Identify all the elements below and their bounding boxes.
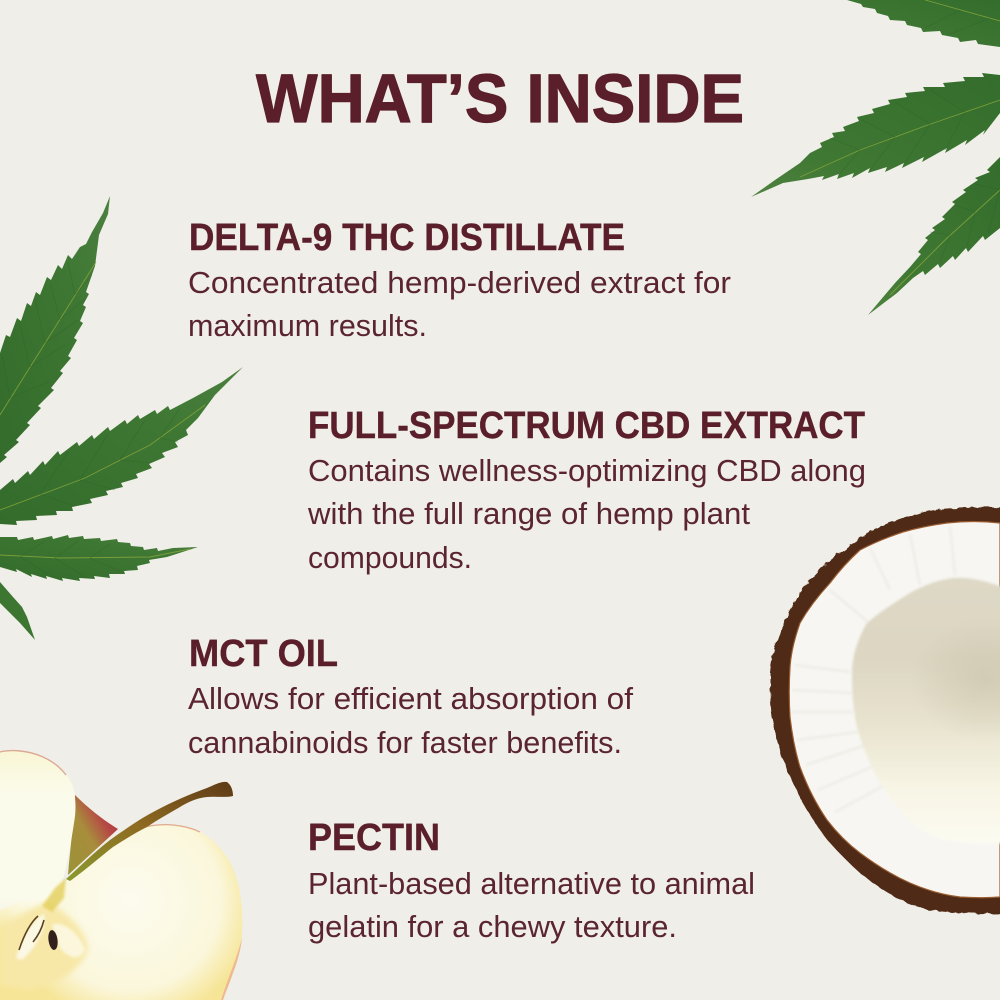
description: MCT oil [188, 681, 633, 760]
ingredient: delta-9 THC distillate [188, 217, 731, 343]
coconut half [770, 507, 1000, 914]
description: pectin: Plant-based alternative to animal [308, 866, 755, 901]
ingredient: pectin [308, 817, 755, 944]
title: WHAT’S INSIDE [256, 60, 744, 137]
coconut white flesh [789, 522, 1000, 898]
description: pectin: gelatin for a chewy texture. [308, 909, 677, 944]
apple right half [0, 825, 242, 1000]
cannabis leaves: left [0, 196, 243, 640]
description: CBD: with the full range of hemp plant [307, 496, 750, 531]
apple right rim blush [140, 825, 200, 832]
cannabis leaves: top right [751, 0, 1000, 315]
ingredient: MCT oil [188, 633, 633, 760]
description: MCT oil: Allows for efficient absorption of [188, 681, 633, 716]
left leaf: upper [0, 196, 110, 463]
description: CBD [307, 453, 866, 575]
apple left rim blush [0, 751, 66, 775]
apple left half [0, 751, 76, 935]
top right leaf: lower [868, 157, 1000, 315]
description: delta-9 [188, 265, 731, 343]
apple core [0, 878, 88, 990]
left leaf: middle [0, 367, 243, 525]
top right leaf: middle [751, 73, 1000, 197]
heading: MCT oil: MCT OIL [189, 633, 338, 675]
coconut hollow shading [910, 618, 1000, 742]
left leaf: lower [0, 535, 198, 581]
description: pectin [308, 866, 755, 944]
description: MCT oil: cannabinoids for faster benefits. [188, 725, 622, 760]
heading: pectin: PECTIN [308, 817, 440, 859]
description: delta-9: maximum results. [188, 308, 427, 343]
description: delta-9: Concentrated hemp-derived extract for [188, 265, 731, 300]
description: CBD: compounds. [308, 540, 472, 575]
heading: CBD: FULL-SPECTRUM CBD EXTRACT [308, 405, 865, 447]
apple stem [66, 782, 233, 881]
top right leaf: top [847, 0, 1000, 47]
coconut shell [770, 507, 1000, 914]
heading: delta-9: DELTA-9 THC DISTILLATE [189, 217, 625, 259]
left leaf: bottom tip [0, 582, 35, 640]
description: CBD: Contains wellness-optimizing CBD along [308, 453, 866, 488]
apple half [0, 751, 242, 1000]
coconut flesh ridges [792, 526, 955, 812]
apple back skin [68, 795, 118, 875]
apple seeds [47, 929, 59, 951]
ingredient: full-spectrum CBD extract [307, 405, 866, 575]
coconut hollow [852, 578, 1000, 844]
